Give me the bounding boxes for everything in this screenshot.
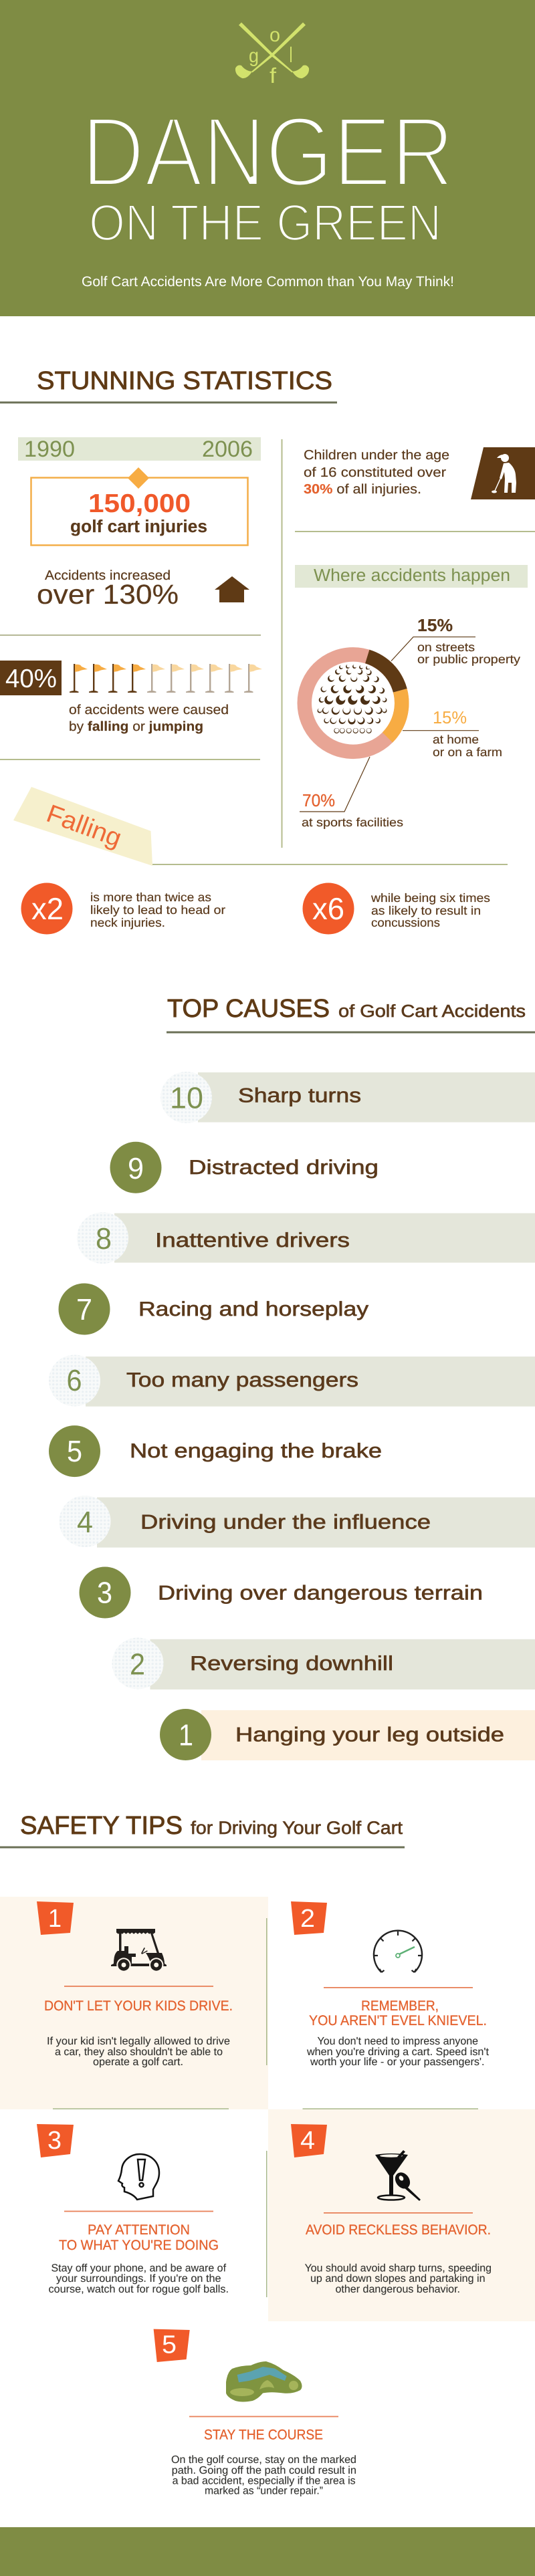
tip 2 heading: REMEMBER,: [361, 1998, 439, 2014]
tip 5 body: a bad accident, especially if the area is: [173, 2475, 356, 2487]
tip 3 body: [48, 2262, 229, 2295]
heading: top causes: TOP CAUSES: [167, 995, 330, 1023]
icon: golfer badge: [471, 447, 535, 499]
icon: golf cart: [111, 1929, 167, 1972]
tip 4 body: [305, 2262, 492, 2295]
heading: stunning statistics: STUNNING STATISTICS: [37, 367, 332, 395]
cause 6: [49, 1355, 535, 1407]
tip 3 heading: PAY ATTENTION: [88, 2222, 190, 2238]
panel: timeline injuries: [18, 437, 261, 610]
heading: top causes: of Golf Cart Accidents: [338, 1001, 526, 1021]
tip 1 body: [47, 2036, 230, 2068]
panel: 40 percent falling or jumping: [0, 661, 262, 734]
label: 15% home: [403, 707, 502, 759]
label: 15% home: at home: [433, 733, 479, 746]
cause 9: 9: [128, 1151, 144, 1185]
panel: falling: [13, 787, 508, 935]
label: 15% home: or on a farm: [433, 745, 502, 759]
panel: tip 4: [268, 2109, 535, 2321]
heading: safety tips: for Driving Your Golf Cart: [191, 1818, 403, 1838]
label: 15% streets: or public property: [417, 653, 520, 666]
cause 7: Racing and horseplay: [138, 1298, 368, 1320]
tip 1 heading: DON'T LET YOUR KIDS DRIVE.: [44, 1998, 233, 2014]
header banner: [0, 0, 535, 316]
heading: top causes: [167, 995, 535, 1034]
icon: speedometer: [374, 1931, 422, 1972]
tip 2 body: You don't need to impress anyone: [317, 2036, 478, 2047]
panel: children stat: of 16 constituted over: [304, 465, 446, 480]
icon: golf course: [226, 2361, 302, 2402]
cause 4: [59, 1496, 535, 1548]
tag 3: [37, 2124, 74, 2157]
tag 3: 3: [47, 2127, 62, 2155]
tip 3 body: course, watch out for rogue golf balls.: [48, 2284, 229, 2295]
cause 3: [79, 1567, 483, 1618]
panel: tip 1: [0, 1897, 268, 2109]
callout: 150,000 injuries: [31, 467, 247, 546]
heading: safety tips: [0, 1812, 405, 1848]
cause 9: [110, 1142, 379, 1193]
stat: x6: as likely to result in: [371, 904, 481, 917]
cause 10: Sharp turns: [238, 1085, 361, 1107]
cause 9: Distracted driving: [189, 1157, 379, 1179]
icon: head with exclamation: [118, 2154, 159, 2200]
caption: falling or jumping: by falling or jumping: [69, 719, 203, 734]
stat: x2: is more than twice as: [90, 891, 211, 904]
cause 6: Too many passengers: [126, 1369, 358, 1391]
callout: 150,000 injuries: 150,000: [88, 489, 191, 518]
cause 4: 4: [77, 1505, 93, 1539]
tag 2: [291, 1901, 327, 1935]
panel: children stat: 30% of all injuries.: [304, 482, 421, 497]
cause 1: [160, 1709, 535, 1760]
tip 4 body: up and down slopes and partaking in: [310, 2273, 486, 2285]
year 2006: 2006: [202, 437, 253, 462]
cause 5: 5: [67, 1434, 82, 1468]
stat: accidents increased: Accidents increased: [45, 568, 171, 583]
icon: crossed golf clubs logo: [235, 23, 309, 88]
cause 5: [49, 1425, 382, 1477]
cause 3: Driving over dangerous terrain: [158, 1583, 483, 1605]
cause 2: 2: [130, 1647, 145, 1681]
caption: falling or jumping: of accidents were caused: [69, 703, 229, 717]
title: danger: DANGER: [82, 97, 454, 207]
footer band: [0, 2527, 535, 2576]
label: 70% sports: [300, 757, 403, 829]
icon: crossed golf clubs logo: o: [270, 25, 280, 46]
tip 2 body: worth your life - or your passengers'.: [310, 2057, 484, 2068]
icon: crossed golf clubs logo: g: [249, 45, 259, 67]
stat: x2: likely to lead to head or: [90, 903, 225, 917]
stat: x2: [21, 883, 225, 935]
panel: where accidents happen: [295, 565, 528, 829]
cause 3: 3: [97, 1575, 112, 1610]
callout: 150,000 injuries: golf cart injuries: [70, 516, 207, 536]
stat: x6: while being six times: [370, 891, 490, 905]
panel: tip 3: [37, 2124, 229, 2295]
tip 3 heading: [59, 2222, 219, 2253]
tip 3 body: Stay off your phone, and be aware of: [51, 2262, 227, 2274]
band heading: Where accidents happen: [314, 565, 510, 585]
cause 2: Reversing downhill: [190, 1653, 393, 1675]
cause 1: 1: [179, 1718, 193, 1752]
caption: falling or jumping: [69, 703, 229, 734]
panel: tip 5: [154, 2329, 356, 2497]
icon: crossed golf clubs logo: f: [270, 64, 276, 88]
cause 7: [59, 1284, 368, 1334]
cause 5: Not engaging the brake: [130, 1440, 382, 1462]
tip 1 body: a car, they also shouldn't be able to: [55, 2046, 223, 2058]
cause 2: [112, 1638, 535, 1689]
heading: stunning statistics: [0, 367, 337, 404]
tag 4: [291, 2124, 327, 2157]
stat: x2: neck injuries.: [90, 916, 165, 929]
stat: accidents increased: [37, 568, 179, 610]
cause 10: [160, 1072, 535, 1123]
stat: x6: concussions: [371, 916, 440, 929]
tip 2 heading: YOU AREN'T EVEL KNIEVEL.: [309, 2013, 487, 2028]
label: 15% home: 15%: [433, 707, 467, 727]
cause 10: 10: [170, 1080, 203, 1115]
badge: 40%: 40%: [5, 665, 57, 693]
subtitle: Golf Cart Accidents Are More Common than You May Think!: [82, 274, 454, 289]
tag 1: 1: [48, 1905, 62, 1933]
stat: accidents increased: over 130%: [37, 579, 179, 610]
stat: x2: x2: [31, 891, 64, 926]
icon row: ten flags: [70, 664, 262, 693]
tip 1 body: operate a golf cart.: [93, 2057, 183, 2068]
cause 8: 8: [96, 1221, 112, 1256]
tip 5 body: On the golf course, stay on the marked: [171, 2454, 356, 2466]
tip 4 body: You should avoid sharp turns, speeding: [305, 2262, 492, 2274]
title: on the green: ON THE GREEN: [89, 194, 441, 251]
tip 5 body: path. Going off the path could result in: [172, 2465, 356, 2476]
tag 1: [37, 1901, 74, 1935]
panel: children stat: Children under the age: [304, 448, 449, 463]
heading: safety tips: SAFETY TIPS: [20, 1812, 183, 1840]
cause 4: Driving under the influence: [140, 1511, 431, 1534]
label: 15% streets: on streets: [417, 640, 475, 654]
tip 4 heading: AVOID RECKLESS BEHAVIOR.: [306, 2222, 491, 2238]
tip 3 body: your surroundings. If you're on the: [56, 2273, 221, 2285]
stat: x6: [302, 883, 490, 935]
icon: martini and car key: [375, 2150, 421, 2201]
tip 3 heading: TO WHAT YOU'RE DOING: [59, 2238, 219, 2253]
tag 2: 2: [300, 1905, 315, 1933]
label: 70% sports: 70%: [302, 790, 335, 810]
list: top causes: [49, 1072, 535, 1760]
ribbon: falling: Falling: [43, 800, 125, 853]
panel: children stat: [304, 447, 535, 499]
tip 5 heading: STAY THE COURSE: [204, 2428, 323, 2443]
tip 5 body: [171, 2454, 356, 2497]
cause 8: Inattentive drivers: [155, 1230, 350, 1252]
label: 15% streets: 15%: [417, 615, 453, 635]
tip 2 body: when you're driving a cart. Speed isn't: [306, 2046, 490, 2058]
label: 15% streets: [391, 615, 520, 666]
cause 6: 6: [67, 1363, 82, 1397]
tag 5: 5: [162, 2331, 177, 2359]
label: 70% sports: at sports facilities: [302, 816, 403, 829]
tip 2 heading: [309, 1998, 487, 2028]
year 1990: 1990: [24, 437, 75, 462]
cause 1: Hanging your leg outside: [235, 1724, 504, 1746]
tag 4: 4: [300, 2127, 315, 2155]
tip 5 body: marked as “under repair.”: [205, 2486, 323, 2497]
chart: donut with golf ball: [304, 650, 409, 751]
tip 1 body: If your kid isn't legally allowed to drive: [47, 2036, 230, 2047]
tip 4 body: other dangerous behavior.: [336, 2284, 460, 2295]
tip 2 body: [306, 2036, 490, 2068]
icon: up arrow: [215, 576, 249, 602]
ribbon: falling: [13, 787, 152, 866]
icon: crossed golf clubs logo: l: [289, 43, 293, 67]
tag 5: [154, 2329, 190, 2362]
stat: x6: x6: [312, 891, 344, 926]
cause 7: 7: [76, 1292, 92, 1326]
panel: tip 2: [291, 1901, 490, 2068]
cause 8: [77, 1212, 535, 1264]
